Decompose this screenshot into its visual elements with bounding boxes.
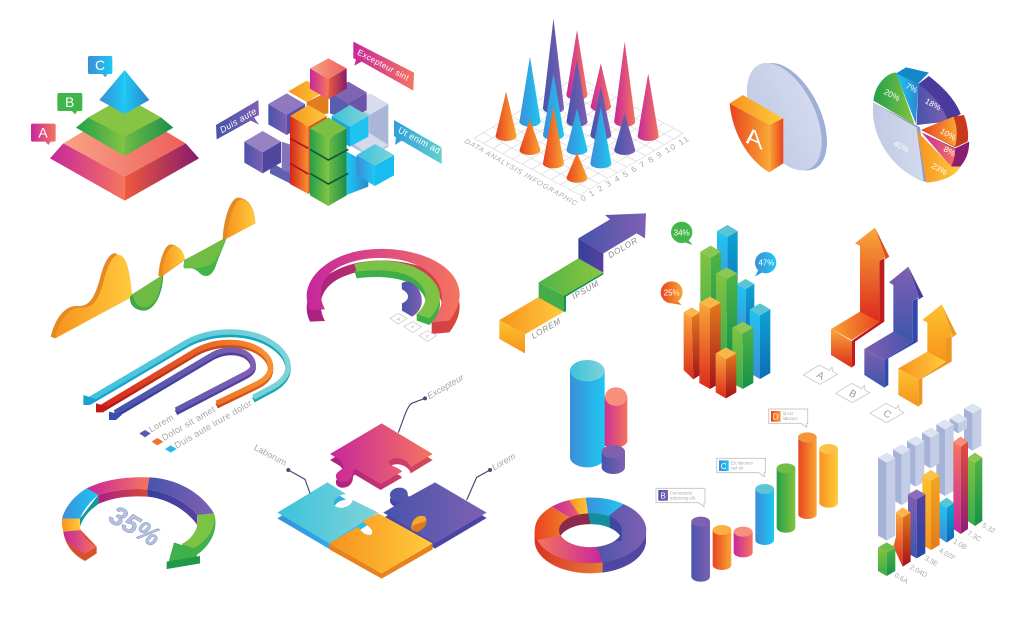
panel: legend and ring chart and puzzle (62, 372, 517, 579)
callout: Excepteur: Excepteur (425, 372, 466, 401)
lavender columns (878, 403, 981, 541)
callout: Excepteur (398, 372, 466, 433)
callout: Lorem: Lorem (490, 451, 517, 472)
cones (496, 18, 659, 183)
bar C (755, 484, 774, 545)
panel: cube cluster (216, 42, 442, 206)
tag B: B (65, 94, 74, 110)
callout B: adipiscing elit. (670, 495, 696, 500)
panel: cylinder bar chart (656, 409, 838, 582)
panel: donut chart (535, 498, 646, 573)
panel: isometric column chart (661, 222, 776, 398)
callout C: C (721, 462, 727, 471)
arrow B (864, 267, 923, 388)
bar yellow (819, 444, 838, 508)
grid (474, 77, 683, 195)
bar B (691, 517, 710, 582)
red top cube (310, 58, 347, 99)
arc key: A (396, 316, 402, 323)
orange column left (684, 307, 700, 379)
green column back (700, 246, 721, 355)
slice 8%: 8% (942, 145, 957, 158)
value labels: 5.32 (981, 522, 996, 535)
arc key: C (425, 334, 431, 340)
middle arc (354, 261, 440, 325)
tag B (57, 93, 82, 114)
puzzle piece: teal (277, 482, 378, 549)
puzzle piece: purple (383, 482, 487, 549)
axis numbers: 0 1 2 3 4 5 6 7 8 9 10 11 (579, 135, 691, 203)
outer arc (307, 249, 460, 334)
bubble 34%: 34% (674, 228, 690, 237)
arc key: F (410, 325, 415, 330)
orange back cube (288, 81, 328, 117)
slice 20%: 20% (882, 87, 901, 103)
callout D (769, 409, 808, 427)
donut wall (535, 530, 646, 573)
step: Ipsum (539, 258, 603, 312)
arrow C (898, 304, 957, 407)
callout: Lorem (467, 451, 517, 500)
panel: wave chart (51, 198, 255, 338)
donut segments (535, 498, 646, 563)
callout B (656, 488, 705, 507)
pyramid tier B (76, 97, 173, 156)
green column (310, 117, 348, 206)
slice 18%: 18% (923, 97, 942, 112)
tag C: C (881, 408, 893, 421)
label: Duis aute (216, 100, 259, 139)
bubble 25%: 25% (664, 288, 680, 297)
panel: exploded pie chart (873, 67, 969, 183)
callout D: laborum (783, 416, 798, 421)
axis title: DATA ANALYSIS INFOGRAPHIC (463, 137, 579, 208)
tag A (31, 124, 56, 145)
step: Dolor arrow: DOLOR (606, 235, 640, 260)
purple cylinder (602, 445, 625, 474)
bubble 34% (671, 222, 693, 245)
pyramid tier C (99, 70, 149, 114)
panel: three cylinders (570, 360, 627, 474)
bar D (798, 432, 817, 519)
tag C (88, 56, 112, 77)
purple left cube (244, 131, 281, 173)
bar orange (713, 525, 731, 570)
tag A: A (814, 370, 826, 383)
lavender cubes (352, 93, 388, 157)
step: Lorem: LOREM (529, 316, 563, 341)
ring arrow chart (62, 477, 215, 569)
cyan front cube (357, 144, 394, 186)
green column center (716, 267, 737, 362)
bar salmon (734, 527, 753, 557)
panel: pyramid chart (31, 56, 199, 201)
slice A: A (746, 122, 763, 156)
wave hump 3 (223, 198, 255, 239)
wave hump 1 (51, 253, 132, 338)
label: Duis aute: Duis aute (218, 106, 258, 135)
value labels: 4.02F (937, 547, 956, 562)
step: Ipsum: IPSUM (570, 278, 601, 301)
legend (139, 398, 254, 453)
callout D: Id est (783, 411, 794, 416)
orange column (290, 105, 327, 194)
panel: U-turn arrows (83, 332, 288, 420)
inner arc (402, 282, 422, 317)
panel: data analysis cone chart (463, 18, 691, 208)
orange column front (716, 347, 736, 398)
value labels: 0.6A (893, 572, 909, 586)
panel: three rising arrows (803, 228, 957, 423)
blue tall column (717, 225, 738, 312)
legend: Lorem (147, 412, 176, 434)
colored columns (878, 437, 982, 576)
slice 23%: 23% (930, 161, 949, 177)
orange column tall (699, 297, 721, 389)
label: Excepteur sint (353, 42, 414, 91)
bubble 47%: 47% (758, 259, 774, 268)
lavender disc (732, 52, 842, 181)
tag B: B (847, 388, 858, 401)
label: Excepteur sint: Excepteur sint (356, 47, 411, 83)
callout: Laborum: Laborum (252, 442, 288, 468)
value labels: 7.3C (966, 530, 982, 543)
callout C (717, 458, 765, 477)
callout: Laborum (252, 442, 310, 493)
tag A (803, 365, 837, 384)
blue lower cube (347, 152, 368, 195)
panel: stair arrow (499, 213, 646, 353)
cyan column mid (737, 279, 754, 345)
arrow A (831, 228, 889, 368)
callout B: B (660, 492, 666, 501)
label: Ut enim ad (394, 120, 442, 164)
value labels: 3.3E (923, 555, 939, 568)
pyramid tier A (50, 107, 199, 201)
ring value: 35% (104, 500, 166, 553)
value labels: 2.04D (908, 564, 928, 579)
puzzle piece: orange (329, 513, 433, 579)
blue cylinder (570, 360, 605, 467)
value labels (893, 522, 996, 586)
slice 10%: 10% (938, 127, 958, 142)
puzzle piece: magenta (330, 423, 433, 490)
slice 7%: 7% (904, 81, 919, 95)
orange arrow (96, 342, 271, 412)
slice 40%: 40% (892, 139, 911, 155)
legend: Duis aute irure dolor (173, 398, 254, 450)
salmon cylinder (602, 387, 627, 448)
wave dip 2 (183, 237, 227, 276)
cyan upper cube (332, 105, 368, 147)
purple arrow (109, 350, 253, 420)
tag C: C (95, 57, 105, 73)
callout D: D (773, 413, 779, 422)
wave dip 1 (130, 275, 163, 311)
green column front (732, 322, 753, 389)
wave hump 2 (158, 244, 185, 277)
arc key (390, 313, 437, 341)
bubble 47% (755, 252, 776, 277)
callout C: Est laborum (731, 460, 753, 465)
panel: pie slice A (730, 52, 842, 181)
legend: Dolor sit amet (160, 404, 217, 443)
cyan arrow (83, 332, 288, 405)
purple lower cube (270, 142, 292, 183)
purple upper cube (268, 93, 305, 135)
tag A: A (38, 125, 48, 141)
panel: paired column chart (878, 403, 996, 586)
tag C (870, 403, 904, 423)
purple back cube (330, 82, 367, 120)
donut inner wall (559, 513, 622, 547)
step: Dolor arrow (578, 213, 646, 273)
tag B (836, 383, 870, 403)
cyan column right (750, 303, 770, 379)
bubble 25% (661, 281, 683, 305)
panel: concentric arcs chart (307, 249, 460, 341)
callout B: Consectetur (670, 490, 693, 495)
value labels: 1.0B (952, 538, 968, 552)
label: Ut enim ad: Ut enim ad (396, 125, 442, 156)
step: Lorem (499, 297, 564, 353)
callout C: sed do (731, 465, 744, 470)
bar green (777, 463, 795, 533)
